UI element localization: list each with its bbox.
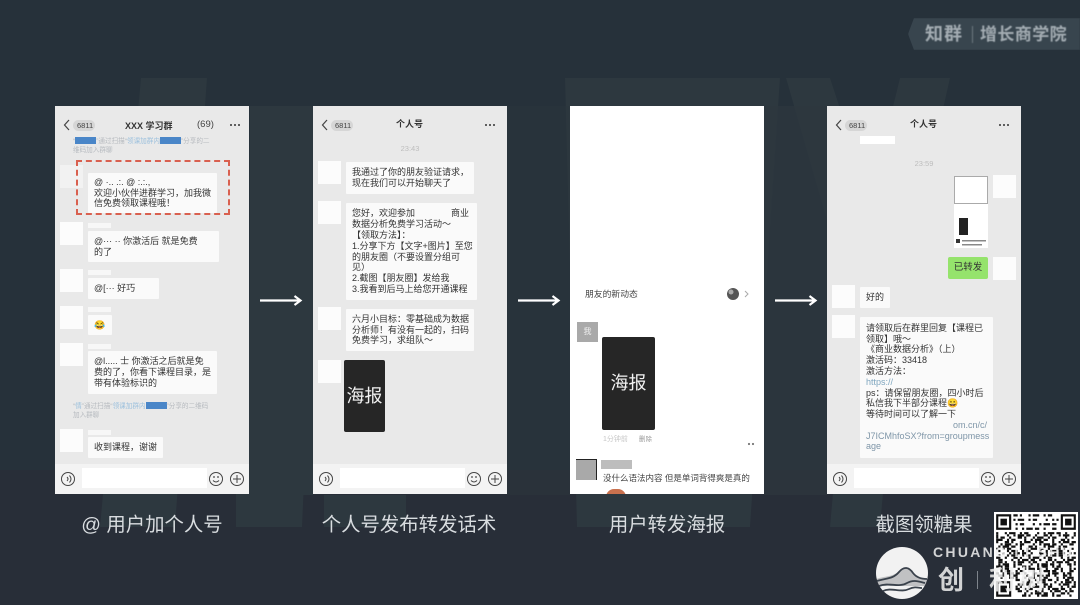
bubble: @··· ·· 你激活后 就是免费 [94,236,198,246]
bubble: instructions: 您好，欢迎参加 商业 [352,208,469,218]
poster [602,337,655,430]
bubble: instructions: 【领取方法】： [352,230,411,240]
chat header: 6811 [849,121,865,130]
system notice 1: 维码加入群聊 [73,147,113,154]
bubble: instructions: 1.分享下方【文字+图片】至您 [352,241,473,251]
input bar [313,464,507,494]
redacted image strip [860,136,895,144]
bubble: 带有体验标识的 [94,378,157,388]
input bar [55,464,249,494]
brand banner: 知群 增长商学院: 增长商学院 [980,25,1067,44]
bubble: @l..... 士 你激活之后就是免 [94,356,204,366]
bubble [860,287,890,308]
chat header [64,119,240,131]
green bubble [948,257,988,279]
comment avatar [576,459,597,480]
bubble: emoji: 😂 [94,320,105,330]
friend avatar and chevron [727,288,748,300]
avatar placeholders [318,161,341,184]
chat header [322,119,495,131]
input bar [827,464,1021,494]
moments heading: 朋友的新动态 [585,289,638,299]
bubble: instructions [346,203,477,300]
forwarded screenshot thumbnail [954,176,988,248]
next comment avatar [606,489,626,499]
highlighted bubble: 信免费领取课程哦！ [94,198,175,208]
panel: screenshot reward chat [827,106,1021,494]
chat header: 6811 [77,121,93,130]
poster [344,360,385,432]
bubble: course details: 等待时间可以了解一下 [866,409,956,419]
arrow [775,295,818,306]
logo wordmark: 利树 [989,565,1049,595]
system notice 2 [73,402,208,419]
chat header [836,119,1009,131]
redacted name [601,460,632,469]
arrow [518,295,560,306]
bubble: course details: age [866,441,881,451]
chat header: 6811 [335,121,351,130]
bubble: course details: 请领取后在群里回复【课程已 [866,323,983,333]
bubble: course details: 私信我下半部分课程😀 [866,398,958,408]
bubble [346,309,474,351]
delete link: 删除 [639,436,652,443]
bubble: instructions: 3.我看到后马上给您开通课程 [352,284,468,294]
post meta: 1分钟前 [603,436,628,443]
comment text: 没什么语法内容 但是单词背得爽是真的 [603,473,750,483]
bubble: instructions: 2.截图【朋友圈】发给我 [352,273,450,283]
arrow [260,295,302,306]
bubble: 的了 [94,246,112,256]
bubble: 好的 [866,292,884,302]
bubble: 我通过了你的朋友验证请求， [352,167,469,177]
bubble: 费的了，你看下课程目录，是 [94,367,211,377]
caption: step 2: 个人号发布转发话术 [322,514,496,536]
bubble: emoji [88,315,112,335]
bubble: 收到课程，谢谢 [94,442,157,452]
system notice 2: 加入群聊 [73,412,99,419]
bubble: 分析师！有没有一起的，扫码 [352,325,469,335]
timestamp: 23:43 [401,144,419,153]
bubble: course details: 激活码：33418 [866,355,927,365]
bubble: course details: 领取】哦～ [866,334,911,344]
red dashed highlight [76,160,230,215]
chat header: 个人号 [396,119,423,129]
chat header: XXX 学习群 [125,121,173,131]
brand banner: 知群 增长商学院: 知群 [925,24,963,44]
brand banner: 知群 增长商学院 [908,18,1080,50]
avatar placeholders [60,165,83,188]
bubble: instructions: 的朋友圈（不要设置分组可 [352,252,460,262]
bubble [88,437,163,458]
caption: step 3: 用户转发海报 [609,514,725,536]
bubble: course details [860,317,993,458]
chat header: (69) [197,119,214,130]
panel: moments screenshot [570,106,764,494]
bubble [346,162,474,194]
bubble: course details: 《商业数据分析》（上） [866,344,961,354]
bubble [88,231,219,262]
timestamp: 23:59 [915,159,933,168]
poster: 海报 [610,373,646,393]
panel: group chat screenshot [55,106,249,494]
panel: personal account chat [313,106,507,494]
caption: step 4: 截图领糖果 [876,514,972,536]
caption: step 1: @ 用户加个人号 [81,514,223,536]
highlighted bubble: 欢迎小伙伴进群学习，加我微 [94,188,211,198]
bubble: course details: ps：请保留朋友圈，四小时后 [866,388,984,398]
poster: 海报 [346,386,382,406]
bubble: 现在我们可以开始聊天了 [352,178,451,188]
user avatar [577,322,598,342]
logo wordmark: 创 [938,565,964,595]
bubble: 免费学习，求组队～ [352,335,433,345]
logo: wave circle [876,547,928,599]
logo wordmark: CHUANG LI SHU [933,544,1074,560]
logo wordmark [933,544,1074,595]
bubble [88,351,217,394]
bubble: 六月小目标：零基础成为数据 [352,314,469,324]
system notice 1 [73,137,210,154]
bubble: course details: J7ICMhfoSX?from=groupmess [866,431,989,441]
system notice 1: “ ”通过扫描“领课加群内 ”分享的二 [73,138,210,145]
user avatar: 我 [584,327,592,336]
highlighted bubble: @ ·.. .:. @ :.:., [94,177,150,187]
green bubble: 已转发 [954,262,982,273]
system notice 2: “情”通过扫描“领课加群内 ”分享的二维码 [73,403,208,410]
avatar placeholders [993,175,1016,198]
QR code [994,512,1078,599]
bubble: course details: 激活方法： [866,366,911,376]
bubble: instructions: 见） [352,262,370,272]
highlighted bubble [88,173,217,213]
bubble [88,278,159,299]
chat header: 个人号 [910,119,937,129]
bubble: course details: om.cn/c/ [953,420,987,430]
bubble: course details: https:// [866,377,893,387]
bubble: @[··· 好巧 [94,283,135,293]
like dots [748,442,754,446]
bubble: instructions: 数据分析免费学习活动～ [352,219,451,229]
